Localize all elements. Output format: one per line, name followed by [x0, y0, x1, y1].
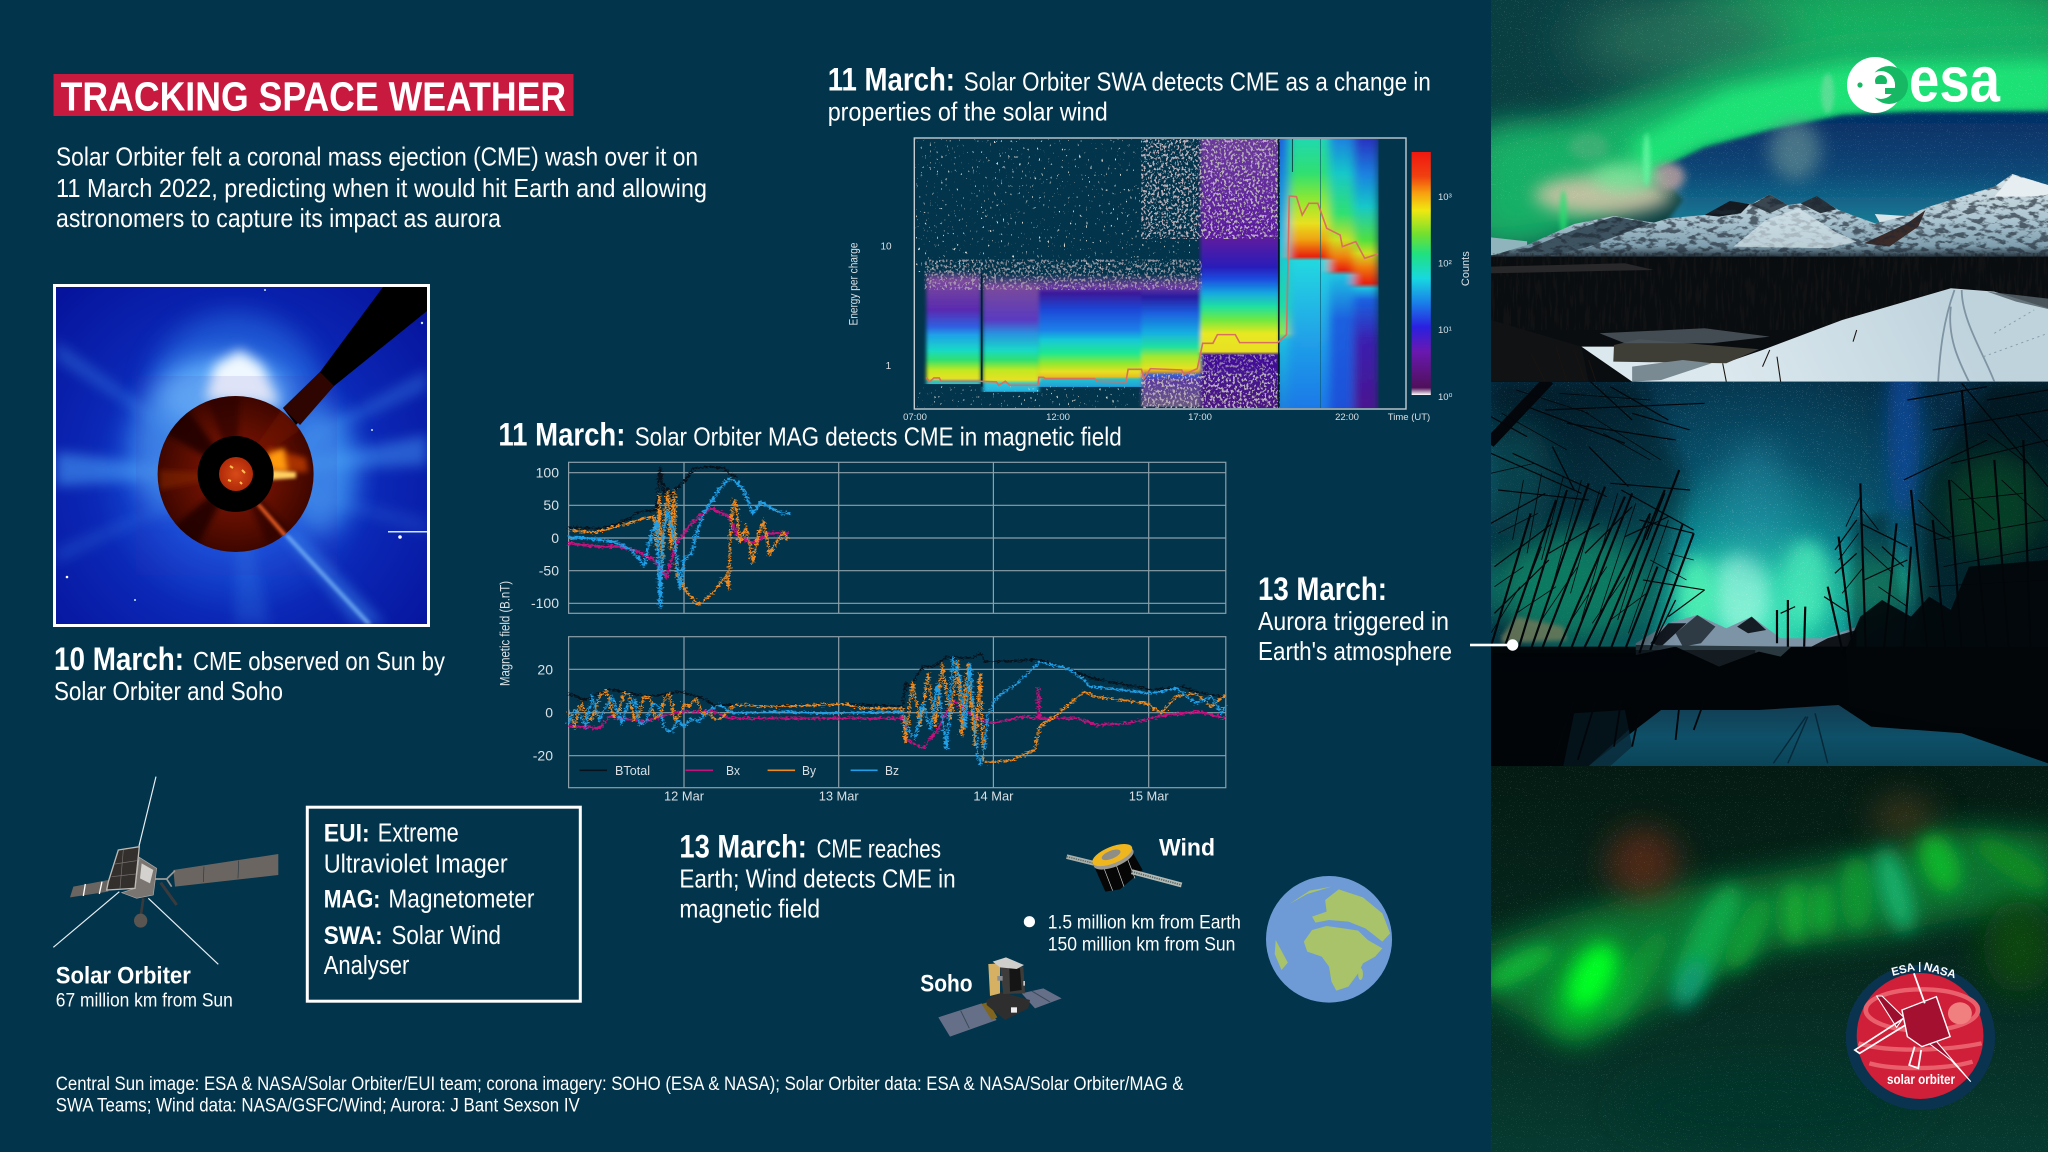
- mountain peaks: [1636, 615, 1856, 647]
- icon: Soho spacecraft: [938, 957, 1062, 1037]
- heading: 13 March Earth: CME reaches: [817, 833, 941, 863]
- intro text block: Solar Orbiter felt a coronal mass ejection (CME) wash over it on: [56, 142, 698, 172]
- icon: Earth globe: [1266, 876, 1392, 1003]
- chart legend: By: [802, 763, 816, 778]
- label: Wind and Soho position: 1.5 million km from Earth: [1048, 911, 1241, 933]
- chart: magnetic field lower panel Wind: 13 Mar: [819, 788, 859, 804]
- panel: instrument glossary box: SWA:: [324, 922, 383, 950]
- mountains: [1491, 173, 2048, 263]
- heading: 10 March: Solar Orbiter and Soho: [54, 676, 283, 706]
- intro text block: astronomers to capture its impact as aurora: [56, 203, 501, 233]
- panel: instrument glossary box: Ultraviolet Imager: [324, 850, 508, 878]
- icon: Solar Orbiter spacecraft: [53, 777, 278, 964]
- heading: 13 March Earth: [679, 828, 956, 923]
- axis labels: 10: [880, 242, 892, 252]
- colour scale bar: [1412, 152, 1453, 403]
- callout: 13 March aurora: [1258, 571, 1452, 666]
- chart: magnetic field lower panel Wind: 15 Mar: [1129, 788, 1169, 804]
- chart: magnetic field upper panel Solar Orbiter: 100: [536, 464, 559, 480]
- heading: 11 March SWA: 11 March:: [828, 62, 955, 98]
- title: TRACKING SPACE WEATHER: [61, 73, 566, 119]
- heading: 10 March: CME observed on Sun by: [193, 646, 445, 676]
- label: Wind and Soho position: [1024, 911, 1241, 956]
- mission badge: NASA: [1922, 961, 1957, 981]
- chart: magnetic field upper panel Solar Orbiter: 0: [551, 530, 559, 546]
- panel: instrument glossary box: EUI:: [324, 820, 370, 848]
- dark ground: [1491, 646, 2048, 766]
- colour scale bar: 10¹: [1438, 325, 1452, 336]
- snow field: [1581, 288, 2048, 382]
- snow road: [1589, 705, 2048, 766]
- label: Soho: Soho: [920, 971, 973, 998]
- chart: magnetic field lower panel Wind: [533, 637, 1226, 804]
- credits text block: [56, 1074, 1184, 1117]
- panel: aurora photo forest: [1480, 343, 2048, 780]
- panel: instrument glossary box: MAG:: [324, 885, 380, 913]
- credits text block: Central Sun image: ESA & NASA/Solar Orbiter/EUI team; corona imagery: SOHO (ESA & NASA); Solar Orbiter data: ESA & NASA/Solar Orbiter/MAG &: [56, 1074, 1184, 1095]
- heading: 11 March SWA: [828, 62, 1431, 127]
- occulter pylon: [283, 287, 427, 425]
- chart: magnetic field upper panel Solar Orbiter: -100: [531, 595, 559, 611]
- intro text block: [56, 142, 707, 233]
- chart: magnetic field lower panel Wind: -20: [533, 748, 553, 764]
- ESA logo: [1847, 44, 2000, 116]
- heading: 10 March: [54, 641, 445, 706]
- badge text: ESA: [1890, 961, 1916, 979]
- axis labels: 07:00: [903, 412, 927, 423]
- axis labels: 1: [886, 361, 892, 372]
- badge disc: [1846, 965, 1995, 1110]
- forest: [1480, 257, 2048, 383]
- panel: instrument glossary box: [307, 807, 580, 1001]
- heading: 13 March Earth: Earth; Wind detects CME in: [679, 863, 956, 893]
- intro text block: 11 March 2022, predicting when it would hit Earth and allowing: [56, 173, 707, 203]
- chart: magnetic field lower panel Wind: 20: [537, 662, 553, 678]
- label: Solar Orbiter: 67 million km from Sun: [56, 990, 233, 1012]
- dark blue sky under arc: [1658, 108, 2048, 224]
- panel: aurora photo mountains: [1491, 0, 2048, 382]
- panel: aurora photo green rays: [1478, 760, 2048, 1152]
- chart legend: [580, 763, 899, 778]
- heading: 11 March MAG: 11 March:: [498, 417, 625, 453]
- heading: 13 March Earth: 13 March:: [679, 828, 807, 864]
- icon: ESA disc: [1847, 57, 1908, 113]
- panel: instrument glossary box: Magnetometer: [388, 885, 535, 913]
- icon: Wind spacecraft: [1067, 839, 1182, 892]
- mission badge: [1846, 961, 1995, 1110]
- chart: magnetic field upper panel Solar Orbiter: 50: [543, 497, 559, 513]
- chart: magnetic field lower panel Wind: 12 Mar: [664, 788, 705, 804]
- chart: magnetic field upper panel Solar Orbiter: [531, 462, 1226, 613]
- axis labels: 22:00: [1335, 412, 1359, 423]
- axis labels: Energy per charge: [848, 242, 860, 326]
- heading: 11 March MAG: Solar Orbiter MAG detects CME in magnetic field: [635, 422, 1122, 452]
- label: Wind: Wind: [1159, 835, 1215, 862]
- chart: SWA energy spectrogram: [848, 138, 1472, 423]
- chart legend: Bx: [726, 763, 740, 778]
- credits text block: SWA Teams; Wind data: NASA/GSFC/Wind; Aurora: J Bant Sexson IV: [56, 1096, 580, 1117]
- panel: instrument glossary box: Extreme: [378, 820, 459, 848]
- solar disc: [219, 457, 253, 491]
- logo wordmark: esa: [1909, 44, 2000, 116]
- colour scale bar: 10²: [1438, 258, 1452, 270]
- red coronagraph disc: [158, 395, 314, 552]
- callout: 13 March aurora: 13 March:: [1258, 571, 1387, 607]
- axis labels: 12:00: [1046, 412, 1070, 423]
- heading: 11 March MAG: [498, 417, 1122, 453]
- panel: instrument glossary box: Solar Wind: [392, 922, 501, 950]
- callout: 13 March aurora: Aurora triggered in: [1258, 606, 1449, 636]
- arrow: connector to aurora photo: [1470, 639, 1518, 651]
- heading: 11 March SWA: properties of the solar wind: [828, 97, 1108, 127]
- colour scale bar: 10³: [1438, 192, 1452, 203]
- axis labels: 17:00: [1188, 412, 1212, 423]
- colour scale bar: 10⁰: [1438, 392, 1453, 403]
- label: Solar Orbiter: [56, 962, 233, 1012]
- panel: sun and corona image: [54, 286, 428, 626]
- heading: 13 March Earth: magnetic field: [679, 893, 820, 923]
- chart legend: Bz: [885, 763, 899, 778]
- chart: magnetic field upper panel Solar Orbiter: -50: [539, 562, 559, 578]
- bare trees: [1489, 380, 2048, 766]
- heading: 10 March: 10 March:: [54, 641, 184, 677]
- axis labels: [848, 242, 1472, 423]
- label: Solar Orbiter: Solar Orbiter: [56, 962, 191, 989]
- mission badge: solar orbiter: [1887, 1071, 1955, 1087]
- panel: instrument glossary box: Analyser: [324, 952, 410, 980]
- label: Wind and Soho position: 150 million km from Sun: [1048, 934, 1235, 956]
- callout: 13 March aurora: Earth's atmosphere: [1258, 636, 1452, 666]
- axis labels: Time (UT): [1388, 412, 1430, 423]
- chart: magnetic field lower panel Wind: 14 Mar: [973, 788, 1014, 804]
- y axis label: magnetic field: Magnetic field (B.nT): [498, 581, 512, 686]
- chart legend: BTotal: [615, 763, 650, 778]
- chart: magnetic field lower panel Wind: 0: [545, 704, 553, 720]
- heading: 11 March SWA: Solar Orbiter SWA detects CME as a change in: [964, 67, 1431, 97]
- axis labels: Counts: [1460, 251, 1472, 286]
